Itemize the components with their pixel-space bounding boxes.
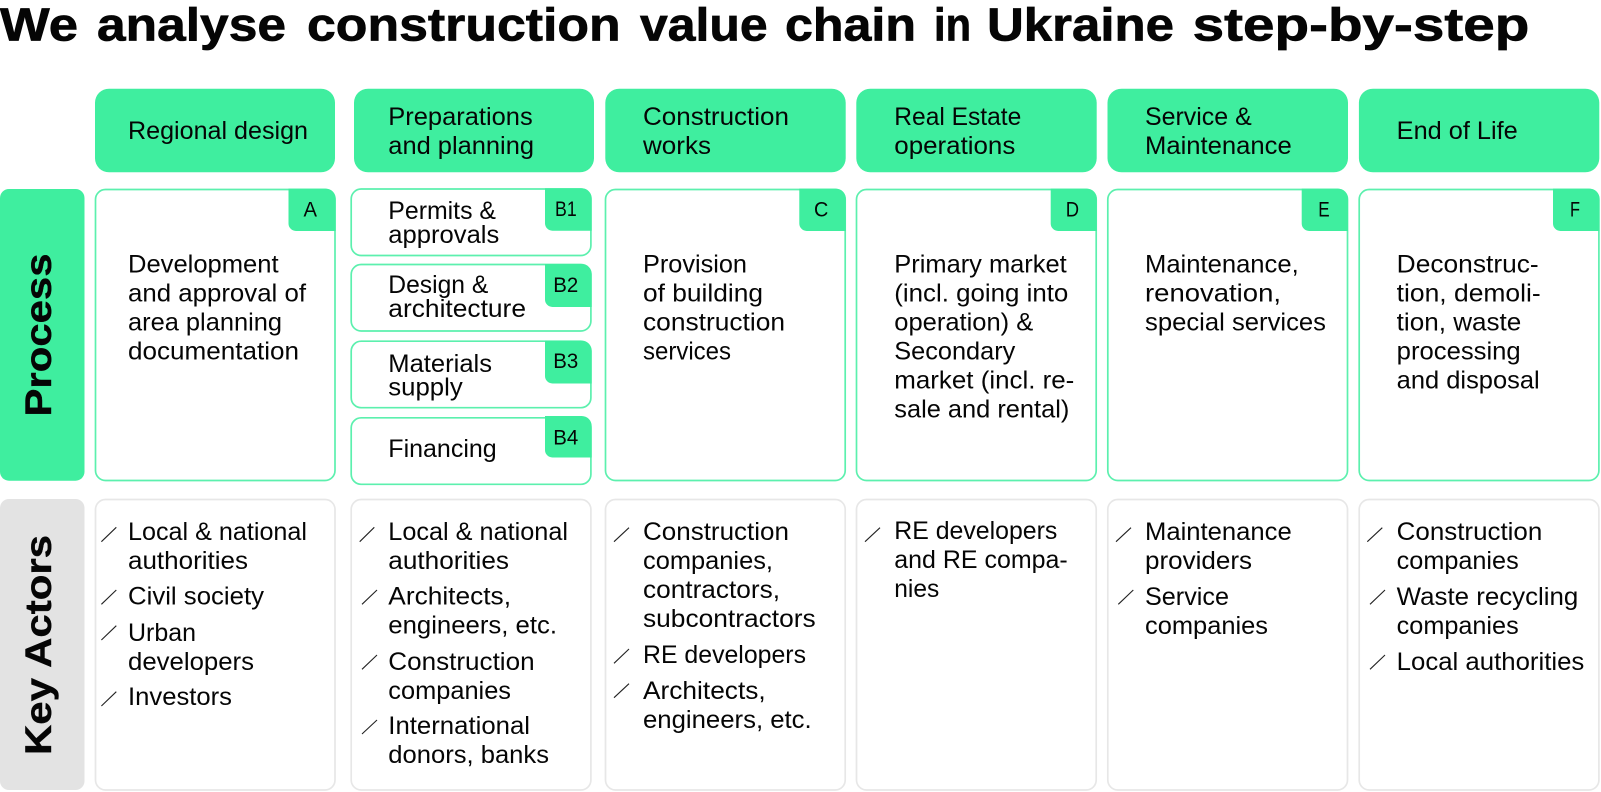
key actors card: Real Estate operations [856, 500, 1096, 790]
title: construction [307, 0, 621, 51]
key actors card: Preparations and planning: Architects, [388, 582, 511, 610]
process card D: Secondary [894, 338, 1016, 366]
process card F: processing [1397, 338, 1521, 366]
key actors card: Preparations and planning [351, 500, 591, 790]
key actors card: Construction works: RE developers [643, 641, 806, 669]
process card A: A [304, 198, 318, 222]
key actors card: Preparations and planning: International [388, 712, 530, 740]
key actors card: Regional design: Local & national [128, 518, 307, 546]
key actors card: Construction works: contractors, [643, 576, 780, 604]
column header: Service & Maintenance: Service & [1145, 103, 1252, 131]
key actors card: Preparations and planning: authorities [388, 547, 509, 575]
key actors card: Construction works [606, 500, 845, 790]
key actors card: Construction works: Construction [643, 518, 789, 546]
process card E [1108, 189, 1348, 480]
process card F [1359, 189, 1600, 480]
key actors card: Preparations and planning: donors, banks [388, 741, 549, 769]
process card C [606, 189, 846, 480]
column header: Real Estate operations: operations [894, 132, 1015, 160]
key actors card: End of Life: companies [1397, 612, 1519, 640]
process card B2: architecture [388, 295, 526, 323]
process card B1: B1 [555, 197, 577, 221]
key actors card: Service & Maintenance: Maintenance [1145, 518, 1292, 546]
process card B4 [351, 416, 592, 484]
title [0, 0, 1529, 51]
process card B3: Materials [388, 350, 492, 378]
title: Ukraine [987, 0, 1174, 51]
column header: Construction works: Construction [643, 103, 789, 131]
process card B2: Design & [388, 271, 489, 299]
title: chain [785, 0, 916, 51]
process card B2: B2 [553, 273, 578, 297]
key actors card: End of Life: Construction [1397, 518, 1542, 546]
key actors card: Construction works: companies, [643, 547, 773, 575]
process card D: operation) & [894, 308, 1034, 336]
process card C: services [643, 338, 731, 366]
process card B3 [351, 341, 592, 408]
key actors card: End of Life: Waste recycling [1397, 583, 1578, 611]
process card D: market (incl. re- [894, 366, 1074, 394]
key actors card: End of Life: Local authorities [1397, 648, 1584, 676]
process card E: renovation, [1145, 280, 1281, 308]
column header: Service & Maintenance [1108, 89, 1348, 172]
key actors card: Regional design: developers [128, 648, 254, 676]
process card A: area planning [128, 308, 282, 336]
process card C: of building [643, 280, 763, 308]
column header: Regional design [95, 89, 335, 172]
key actors card: End of Life [1359, 500, 1599, 790]
process card B1 [351, 188, 592, 256]
process card C: Provision [643, 250, 747, 278]
key actors card: Regional design [96, 500, 335, 790]
key actors card: End of Life: companies [1397, 547, 1519, 575]
process card B3: B3 [553, 349, 578, 373]
key actors card: Service & Maintenance: Service [1145, 583, 1229, 611]
row label: Key Actors: Key Actors [18, 535, 59, 755]
key actors card: Construction works: subcontractors [643, 605, 816, 633]
title: step-by-step [1193, 0, 1529, 51]
column header: Real Estate operations: Real Estate [894, 103, 1021, 131]
column header: Preparations and planning [354, 89, 594, 172]
key actors card: Preparations and planning: Local & national [388, 518, 568, 546]
process card C: C [814, 198, 828, 222]
key actors card: Preparations and planning: engineers, etc. [388, 612, 557, 640]
process card F: and disposal [1397, 366, 1540, 394]
process card B1: Permits & [388, 197, 496, 225]
process card B2 [351, 264, 592, 331]
process card A: Development [128, 250, 279, 278]
process card D: sale and rental) [894, 396, 1069, 424]
key actors card: Preparations and planning: Construction [388, 648, 535, 676]
key actors card: Construction works: Architects, [643, 677, 766, 705]
process card E: Maintenance, [1145, 250, 1299, 278]
key actors card: Service & Maintenance [1108, 500, 1348, 790]
key actors card: Regional design: Urban [128, 619, 196, 647]
process card A: and approval of [128, 280, 306, 308]
column header: End of Life [1359, 89, 1599, 172]
title: in [934, 0, 971, 51]
column header: Regional design: Regional design [128, 117, 308, 145]
key actors card: Regional design: Investors [128, 683, 232, 711]
process card F: F [1570, 198, 1580, 222]
process card E: special services [1145, 308, 1326, 336]
key actors card: Preparations and planning: companies [388, 677, 511, 705]
column header: Service & Maintenance: Maintenance [1145, 132, 1292, 160]
column header: Real Estate operations [856, 89, 1097, 172]
key actors card: Real Estate operations: nies [894, 575, 939, 603]
row label: Process [0, 189, 84, 481]
row label: Process: Process [18, 254, 59, 416]
key actors card: Construction works: engineers, etc. [643, 706, 812, 734]
title: value [640, 0, 768, 51]
process card D: D [1066, 198, 1079, 222]
process card A [96, 189, 336, 480]
process card D [856, 189, 1097, 480]
column header: End of Life: End of Life [1397, 117, 1518, 145]
process card A: documentation [128, 338, 299, 366]
process card D: Primary market [894, 250, 1067, 278]
key actors card: Real Estate operations: and RE compa- [894, 546, 1068, 574]
process card B4: B4 [553, 425, 578, 449]
column header: Construction works [605, 89, 846, 172]
title: We [0, 0, 78, 51]
key actors card: Service & Maintenance: companies [1145, 612, 1268, 640]
title: analyse [97, 0, 286, 51]
process card B3: supply [388, 374, 463, 402]
process card F: tion, waste [1397, 308, 1521, 336]
process card B4: Financing [388, 435, 497, 463]
column header: Preparations and planning: Preparations [388, 103, 533, 131]
process card F: tion, demoli- [1397, 280, 1541, 308]
process card F: Deconstruc- [1397, 250, 1539, 278]
process card C: construction [643, 308, 785, 336]
column header: Construction works: works [642, 132, 711, 160]
key actors card: Service & Maintenance: providers [1145, 547, 1252, 575]
process card B1: approvals [388, 221, 499, 249]
process card D: (incl. going into [894, 280, 1068, 308]
process card E: E [1318, 198, 1330, 222]
key actors card: Real Estate operations: RE developers [894, 517, 1057, 545]
key actors card: Regional design: Civil society [128, 582, 265, 610]
row label: Key Actors [0, 499, 84, 790]
key actors card: Regional design: authorities [128, 547, 248, 575]
column header: Preparations and planning: and planning [388, 132, 534, 160]
